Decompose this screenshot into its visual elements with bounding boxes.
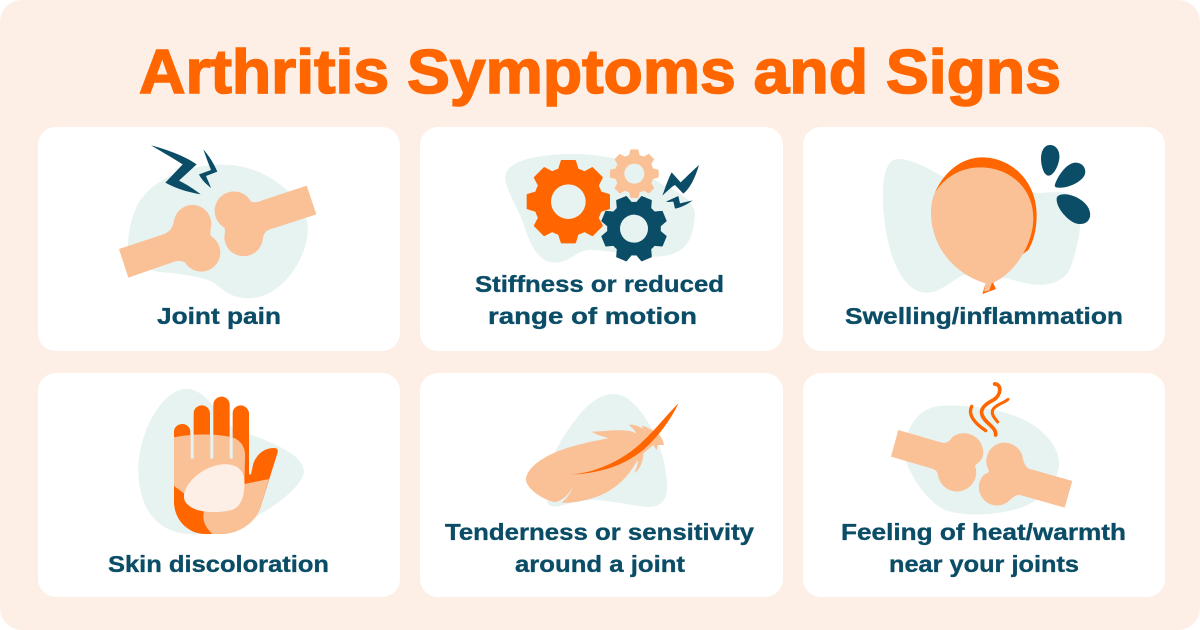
panel: skin discoloration	[38, 373, 400, 597]
label: tenderness	[445, 519, 754, 577]
icon: feather	[526, 394, 678, 507]
panel: swelling	[803, 127, 1165, 351]
icon: hand	[138, 389, 304, 534]
label: joint pain: Joint pain	[157, 303, 281, 329]
label: stiffness	[475, 271, 724, 329]
label: tenderness: Tenderness or sensitivity	[445, 519, 754, 545]
panel: stiffness	[420, 127, 783, 351]
label: stiffness: Stiffness or reduced	[475, 271, 724, 297]
title: Arthritis Symptoms and Signs	[139, 38, 1061, 107]
panel: heat	[803, 373, 1165, 597]
label: heat	[841, 519, 1126, 577]
label: stiffness: range of motion	[488, 303, 697, 329]
panel: tenderness	[420, 373, 783, 597]
panel: joint pain	[38, 127, 400, 351]
icon: balloon	[883, 145, 1090, 294]
icon: warm joint	[891, 384, 1072, 514]
label: heat: Feeling of heat/warmth	[841, 519, 1126, 545]
label: tenderness: around a joint	[515, 551, 685, 577]
icon: gears	[505, 150, 699, 263]
label: heat: near your joints	[889, 551, 1079, 577]
label: skin discoloration: Skin discoloration	[108, 551, 329, 577]
label: swelling: Swelling/inflammation	[845, 303, 1123, 329]
icon: painful joint	[119, 145, 316, 298]
